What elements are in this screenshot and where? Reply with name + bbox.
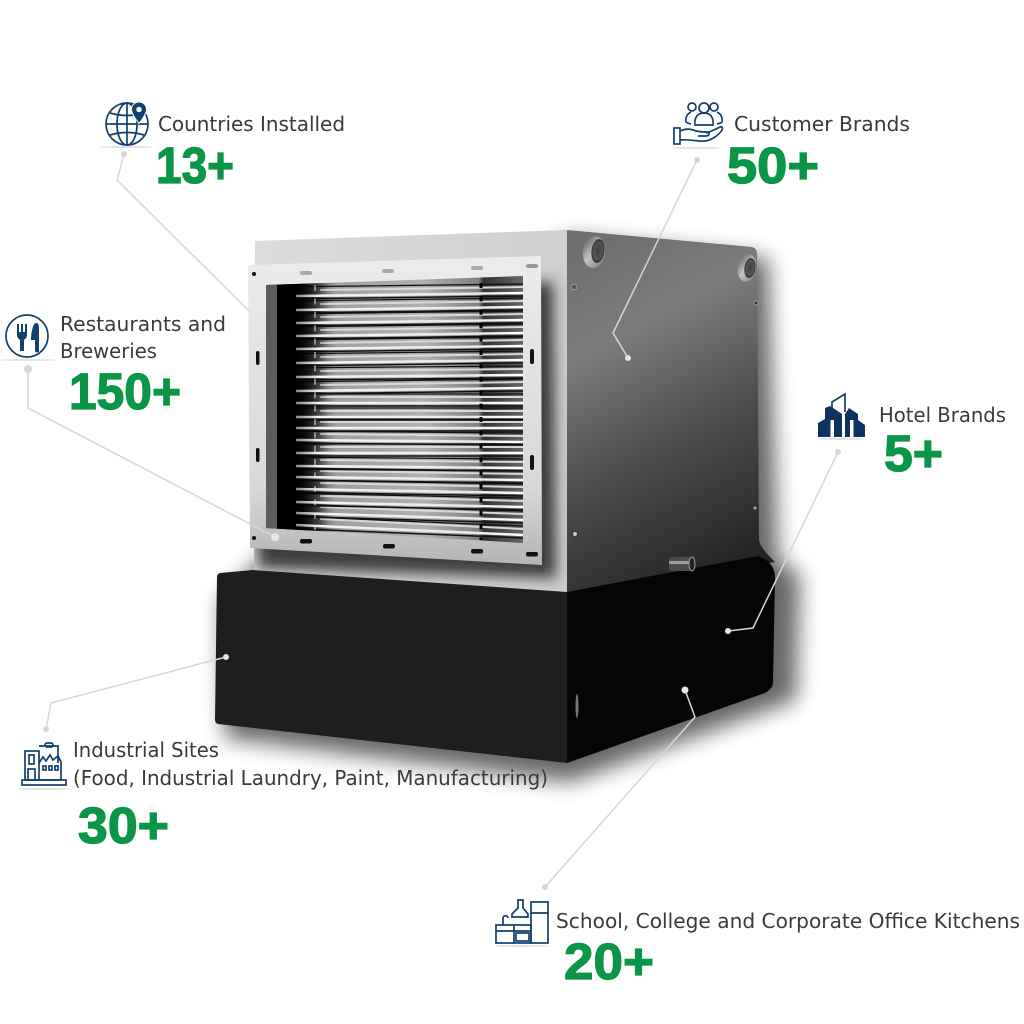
label: school, college and corporate office kitchens: 20+ xyxy=(564,933,654,990)
label: industrial sites: Industrial Sites xyxy=(73,738,219,762)
icon: people on hand xyxy=(672,103,722,149)
frame mounting slots xyxy=(252,264,538,556)
base side face xyxy=(567,556,775,763)
label: restaurants and breweries xyxy=(60,312,226,420)
label: customer brands xyxy=(727,112,910,194)
label: customer brands: Customer Brands xyxy=(734,112,910,136)
label: countries installed xyxy=(156,112,345,194)
label: school, college and corporate office kitchens xyxy=(556,909,1020,990)
label: industrial sites: (Food, Industrial Laundry, Paint, Manufacturing) xyxy=(73,766,548,790)
label: restaurants and breweries: Breweries xyxy=(60,339,157,363)
drop shadow xyxy=(222,238,800,782)
icon: hotel buildings xyxy=(816,394,866,440)
product unit illustration xyxy=(215,230,800,782)
pipe ports and screws xyxy=(571,235,758,571)
label: industrial sites xyxy=(73,738,548,854)
front housing panel xyxy=(254,230,567,595)
leader line: hotel brands xyxy=(725,449,841,634)
label: restaurants and breweries: 150+ xyxy=(69,363,181,420)
base front face xyxy=(215,570,567,763)
leader line: customer brands xyxy=(613,157,700,361)
air intake frame xyxy=(248,256,542,565)
label: countries installed: Countries Installed xyxy=(158,112,345,136)
fin opening xyxy=(266,276,524,544)
label: hotel brands xyxy=(879,403,1006,482)
label: hotel brands: 5+ xyxy=(884,425,943,482)
label: customer brands: 50+ xyxy=(727,137,819,194)
icon: kitchen xyxy=(494,900,550,947)
label: industrial sites: 30+ xyxy=(78,797,169,854)
leader line: school kitchens xyxy=(542,686,695,890)
side housing panel xyxy=(567,230,775,595)
label: restaurants and breweries: Restaurants and xyxy=(60,312,226,336)
leader line: restaurants xyxy=(24,365,279,541)
label: school, college and corporate office kitchens: School, College and Corporate Office Kitchens xyxy=(556,909,1020,933)
icon: factory xyxy=(15,743,73,790)
leader line: industrial sites xyxy=(43,654,229,732)
icon: globe with pin xyxy=(100,102,154,148)
leader line: countries xyxy=(117,151,249,311)
label: hotel brands: Hotel Brands xyxy=(879,403,1006,427)
icon: fork and knife xyxy=(0,315,56,361)
label: countries installed: 13+ xyxy=(156,137,234,194)
